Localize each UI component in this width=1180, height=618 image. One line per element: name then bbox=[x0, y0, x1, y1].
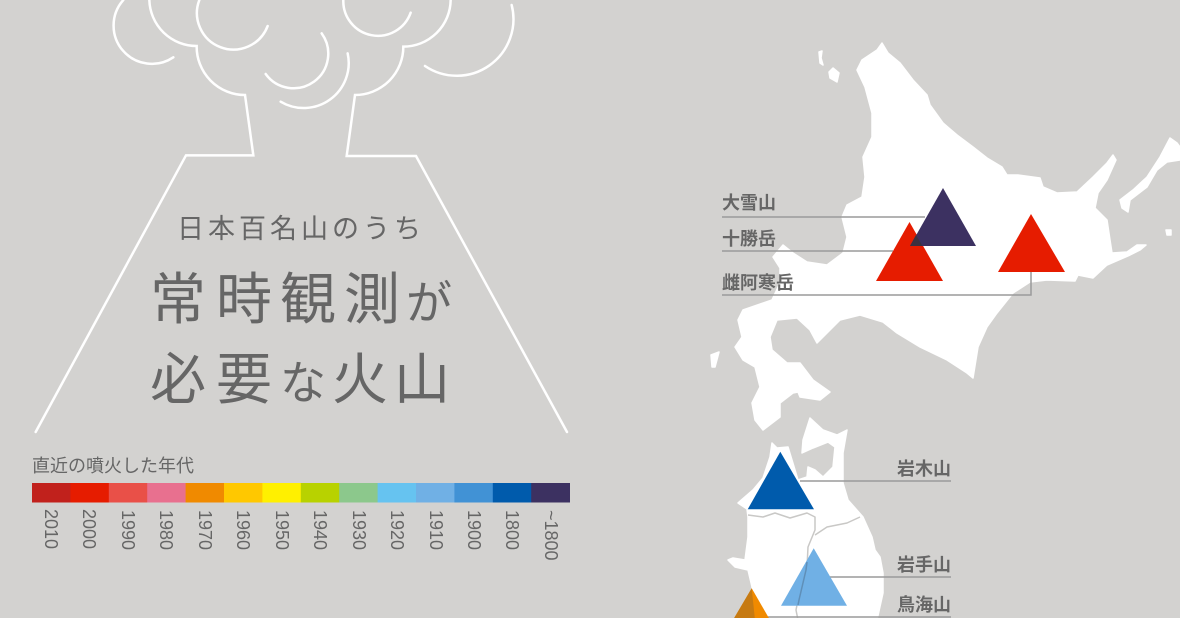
label: 岩手山: 岩手山 bbox=[897, 555, 951, 575]
legend colour bar bbox=[32, 483, 570, 502]
legend year labels: 1940 bbox=[310, 510, 330, 550]
label: 岩木山: 岩木山 bbox=[897, 459, 951, 479]
marker: 雌阿寒岳 bbox=[998, 214, 1065, 272]
islands bbox=[711, 51, 1180, 367]
legend year labels: 1980 bbox=[156, 510, 176, 550]
legend year labels bbox=[41, 509, 561, 561]
cloud arcs bbox=[114, 0, 513, 108]
volcano right outline bbox=[347, 0, 567, 432]
legend year labels: 1950 bbox=[272, 510, 292, 550]
label: 雌阿寒岳: 雌阿寒岳 bbox=[722, 273, 794, 293]
title bbox=[150, 214, 452, 411]
volcano markers bbox=[733, 188, 1065, 618]
leader lines bbox=[722, 217, 1031, 617]
legend title: 直近の噴火した年代 bbox=[32, 456, 194, 476]
legend year labels: 2010 bbox=[41, 509, 61, 549]
label: 鳥海山: 鳥海山 bbox=[897, 594, 951, 615]
main title particle: が bbox=[406, 277, 452, 329]
legend year labels: ~1800 bbox=[541, 510, 561, 561]
map of northern Japan bbox=[711, 43, 1180, 618]
main title line 2 end: 火山 bbox=[332, 348, 450, 411]
legend year labels: 1800 bbox=[502, 510, 522, 550]
main title particle: な bbox=[280, 357, 326, 409]
legend year labels: 1990 bbox=[118, 510, 138, 550]
label: 十勝岳: 十勝岳 bbox=[722, 229, 776, 249]
legend year labels: 1920 bbox=[387, 510, 407, 550]
Hokkaido bbox=[735, 43, 1146, 430]
legend year labels: 1910 bbox=[426, 510, 446, 550]
legend year labels: 1970 bbox=[195, 510, 215, 550]
marker overlap bbox=[910, 235, 922, 246]
legend year labels: 1900 bbox=[464, 510, 484, 550]
legend year labels: 2000 bbox=[79, 509, 99, 549]
marker: 岩手山 bbox=[781, 548, 847, 606]
label: 大雪山: 大雪山 bbox=[722, 193, 776, 213]
main title line 2: 必要 bbox=[150, 348, 272, 411]
marker: 大雪山 bbox=[910, 188, 976, 246]
legend year labels: 1960 bbox=[233, 510, 253, 550]
legend year labels: 1930 bbox=[349, 510, 369, 550]
northern Honshu bbox=[728, 418, 883, 618]
main title line 1: 常時観測 bbox=[150, 268, 400, 331]
volcano left outline bbox=[36, 0, 253, 432]
legend: most recent eruption decade bbox=[32, 456, 570, 561]
volcano illustration with eruption cloud bbox=[36, 0, 567, 432]
prefecture borders bbox=[748, 513, 860, 618]
subtitle: 日本百名山のうち bbox=[177, 214, 421, 244]
marker: 岩木山 bbox=[748, 452, 814, 509]
volcano labels bbox=[722, 193, 951, 615]
marker: 鳥海山 bbox=[733, 588, 770, 618]
marker: 十勝岳 bbox=[876, 222, 943, 281]
